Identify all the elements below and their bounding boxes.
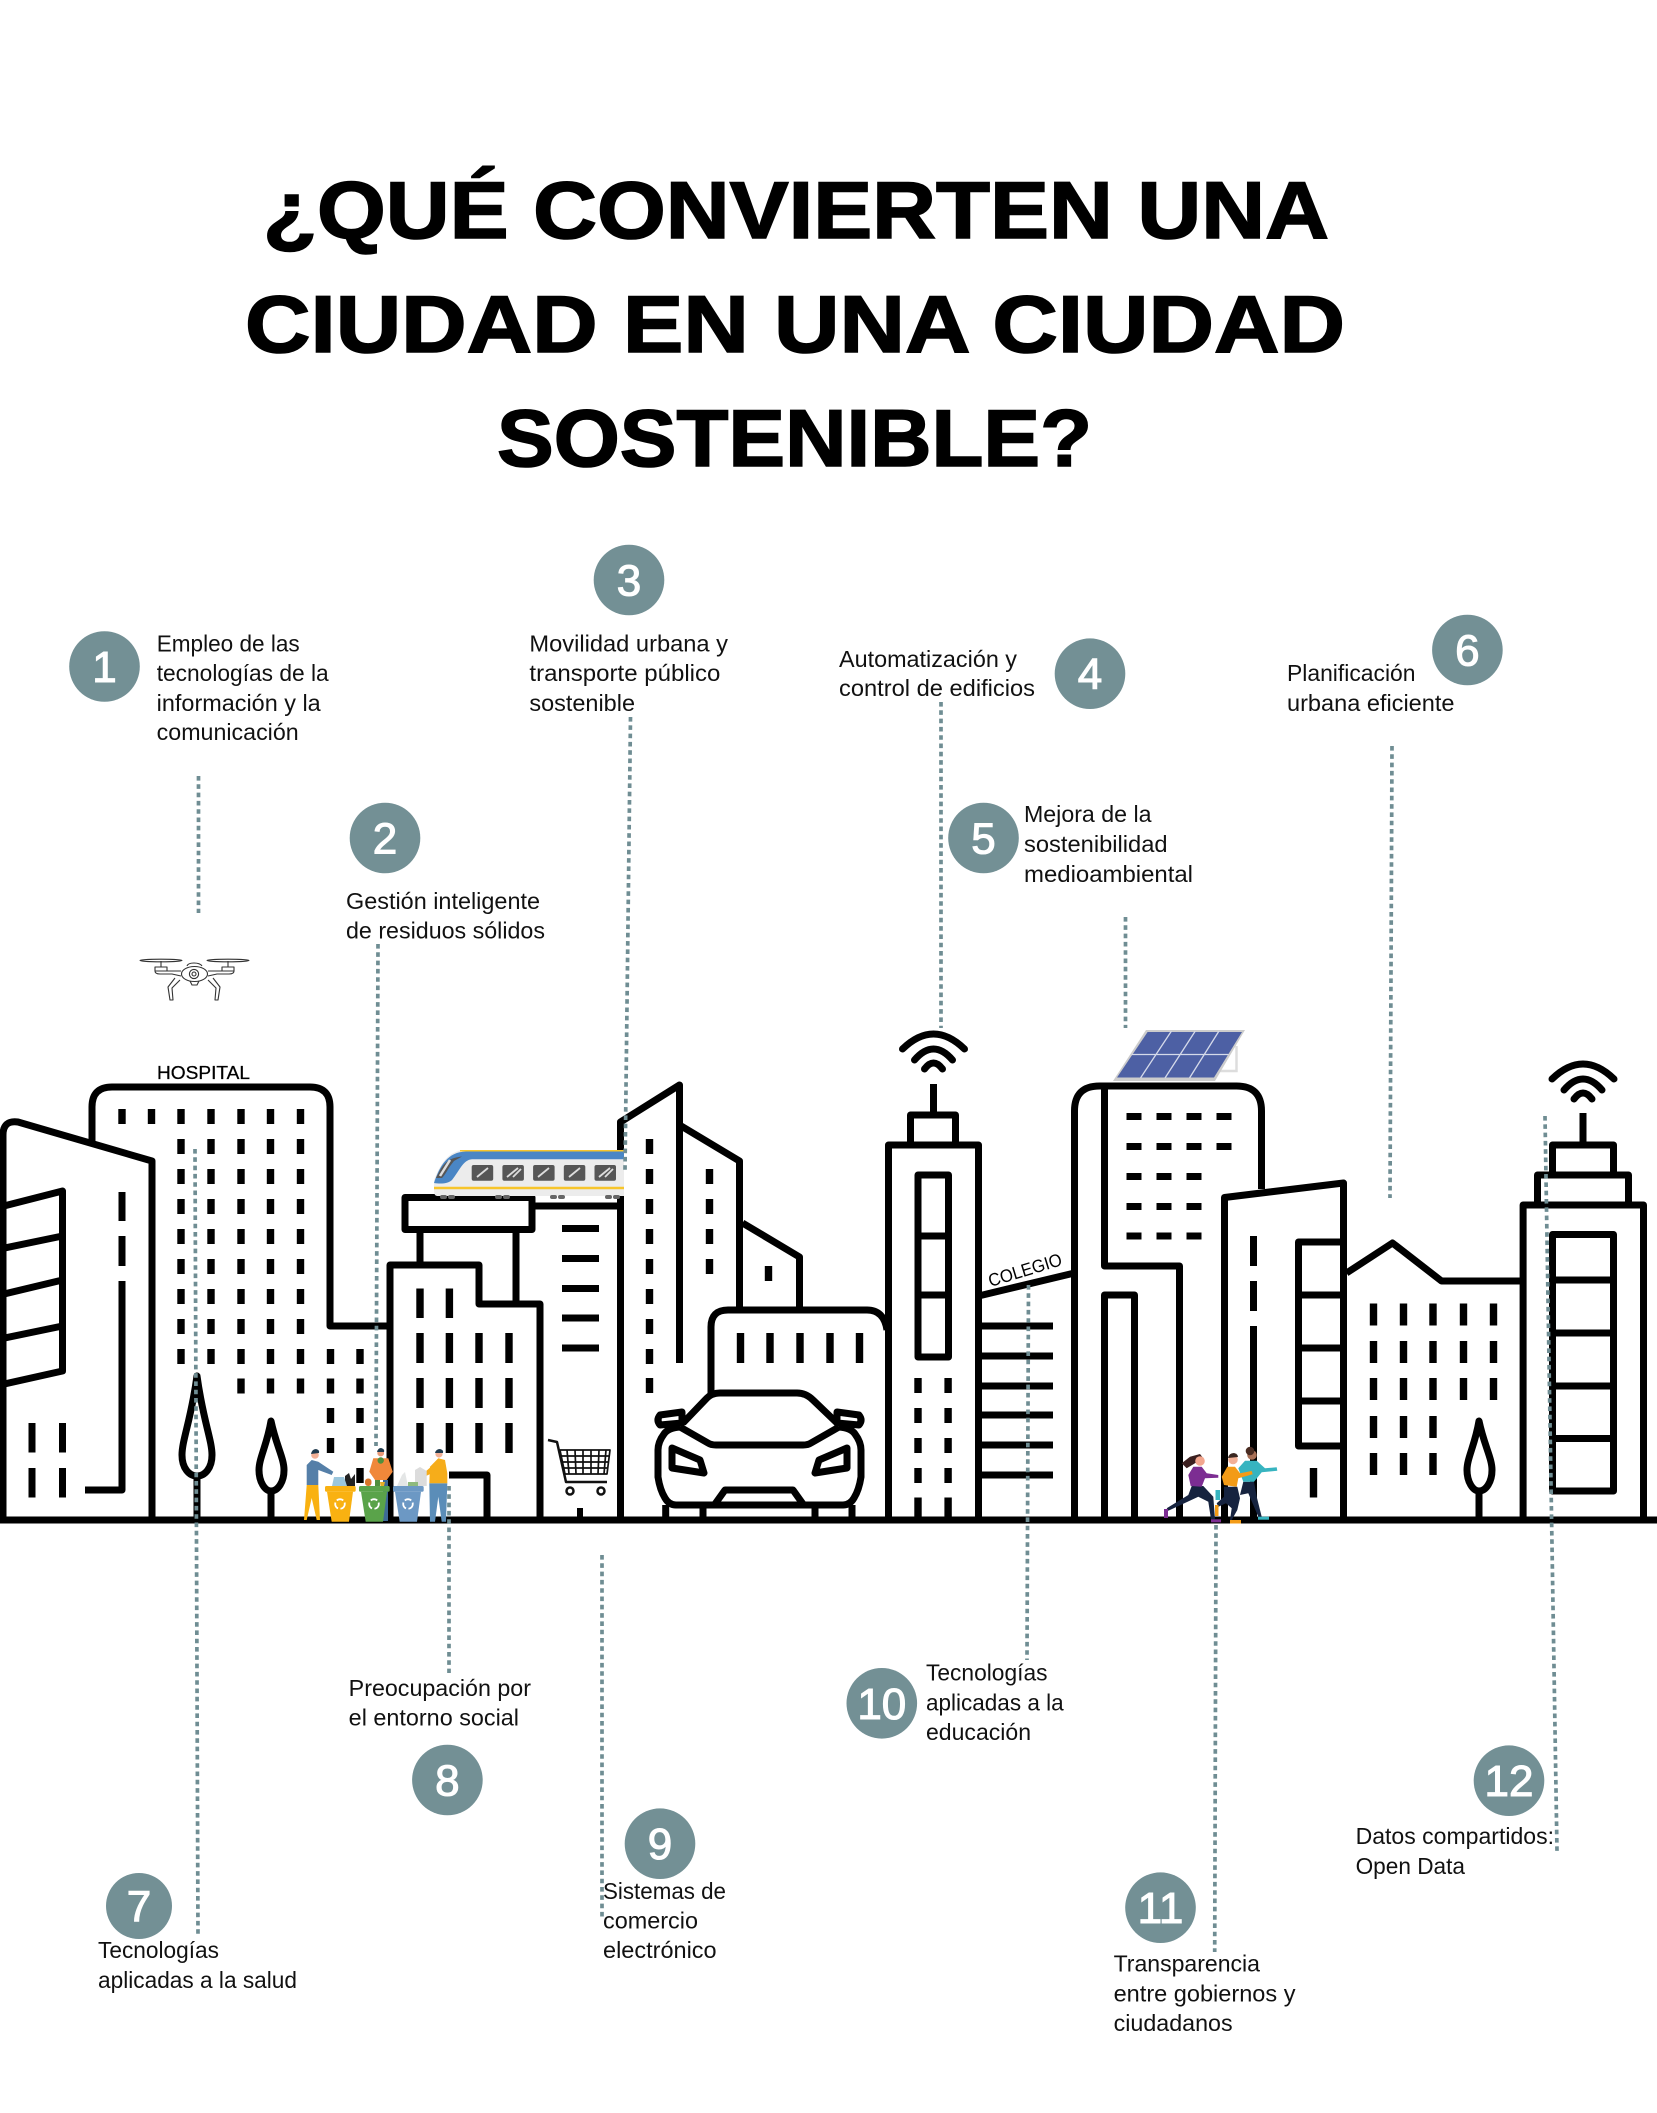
item 1: información y la — [157, 690, 321, 716]
building: central block with rooftop — [390, 1198, 621, 1520]
item 5 — [948, 801, 1193, 887]
item 11: entre gobiernos y — [1114, 1981, 1296, 2007]
item 2: 2 — [373, 814, 397, 864]
item 12: 12 — [1485, 1757, 1533, 1806]
title: SOSTENIBLE? — [497, 394, 1092, 484]
item 4: 4 — [1078, 650, 1102, 699]
item 5: sostenibilidad — [1024, 831, 1168, 857]
item 8: Preocupación por — [349, 1675, 531, 1701]
item 10: 10 — [857, 1680, 906, 1729]
label: colegio: COLEGIO — [986, 1249, 1064, 1291]
item 6: urbana eficiente — [1287, 690, 1454, 716]
item 6 — [1287, 615, 1503, 716]
item 9: 9 — [648, 1820, 672, 1869]
person: purple shirt — [1164, 1454, 1221, 1522]
person: yellow shirt — [422, 1449, 447, 1522]
item 1: tecnologías de la — [157, 660, 329, 686]
building: slanted roof with balconies — [1224, 1183, 1344, 1520]
icon: train — [434, 1150, 624, 1197]
building: behind the car — [711, 1310, 887, 1393]
item 10: aplicadas a la — [926, 1690, 1064, 1716]
building: right antenna tower — [1523, 1064, 1644, 1520]
item 11 — [1114, 1872, 1296, 2036]
skyline illustration — [0, 1034, 1657, 1520]
item 4: Automatización y — [839, 646, 1018, 672]
item 1: 1 — [92, 643, 117, 692]
label: hospital: HOSPITAL — [157, 1062, 250, 1083]
item 7: aplicadas a la salud — [98, 1967, 297, 1993]
item 12: Datos compartidos: — [1356, 1823, 1554, 1849]
item 1: Empleo de las — [157, 631, 300, 657]
item 5: 5 — [971, 814, 996, 864]
item 10: educación — [926, 1719, 1031, 1745]
item 5: Mejora de la — [1024, 801, 1152, 827]
person: blue shirt — [304, 1449, 333, 1520]
item 8 — [349, 1675, 531, 1815]
item 7: Tecnologías — [98, 1937, 219, 1963]
waste items — [332, 1467, 427, 1490]
item 4: control de edificios — [839, 675, 1035, 701]
icon: wifi — [902, 1034, 964, 1069]
title: CIUDAD EN UNA CIUDAD — [245, 280, 1345, 370]
item 9: Sistemas de — [603, 1878, 726, 1904]
item 9: electrónico — [603, 1937, 717, 1963]
item 1 — [69, 631, 329, 745]
item 3: transporte público — [529, 660, 720, 686]
item 2: Gestión inteligente — [346, 888, 540, 914]
item 2: de residuos sólidos — [346, 918, 545, 944]
item 12: Open Data — [1356, 1853, 1465, 1879]
building: left slanted tower — [0, 1122, 152, 1520]
item 6: Planificación — [1287, 660, 1416, 686]
building: school — [978, 1249, 1074, 1475]
item 7: 7 — [127, 1882, 151, 1932]
item 4 — [839, 638, 1125, 709]
item 12 — [1356, 1745, 1554, 1879]
item 11: ciudadanos — [1114, 2010, 1233, 2036]
item 7 — [98, 1873, 297, 1993]
icon: trees — [182, 1376, 1492, 1520]
item 10: Tecnologías — [926, 1660, 1048, 1686]
item 3 — [529, 545, 729, 716]
item 1: comunicación — [157, 719, 299, 745]
item 3: 3 — [617, 556, 641, 606]
icon: recycling people and bins — [304, 1448, 447, 1522]
title: ¿QUÉ CONVIERTEN UNA — [263, 165, 1329, 256]
item 6: 6 — [1455, 626, 1480, 676]
item 10 — [846, 1660, 1064, 1745]
item 2 — [346, 803, 545, 944]
recycling bins — [325, 1486, 424, 1522]
item 3: sostenible — [529, 690, 635, 716]
item 11: 11 — [1138, 1884, 1183, 1933]
icon: solar panel — [1113, 1030, 1245, 1081]
building: solar roof tower — [1074, 1086, 1262, 1520]
building: antenna tower — [888, 1034, 978, 1520]
person: orange shirt — [1215, 1453, 1253, 1524]
item 9: comercio — [603, 1908, 698, 1934]
icon: car — [658, 1393, 861, 1520]
title — [245, 165, 1345, 484]
item 9 — [603, 1808, 726, 1963]
icon: wifi — [1552, 1064, 1614, 1099]
ground line — [0, 1516, 1657, 1524]
building: gabled house — [1346, 1243, 1522, 1475]
building: stepped towers — [620, 1085, 800, 1520]
icon: running people — [1164, 1447, 1277, 1524]
dotted connector lines — [195, 702, 1557, 1952]
person: orange shirt — [369, 1448, 393, 1521]
item 3: Movilidad urbana y — [529, 631, 729, 657]
icon: drone — [140, 959, 249, 1000]
item 11: Transparencia — [1114, 1951, 1260, 1977]
building: hospital — [92, 1062, 388, 1483]
person: teal shirt — [1238, 1447, 1277, 1520]
icon: shopping cart — [548, 1440, 610, 1494]
item 8: el entorno social — [349, 1705, 519, 1731]
item 5: medioambiental — [1024, 861, 1193, 887]
item 8: 8 — [435, 1756, 460, 1806]
